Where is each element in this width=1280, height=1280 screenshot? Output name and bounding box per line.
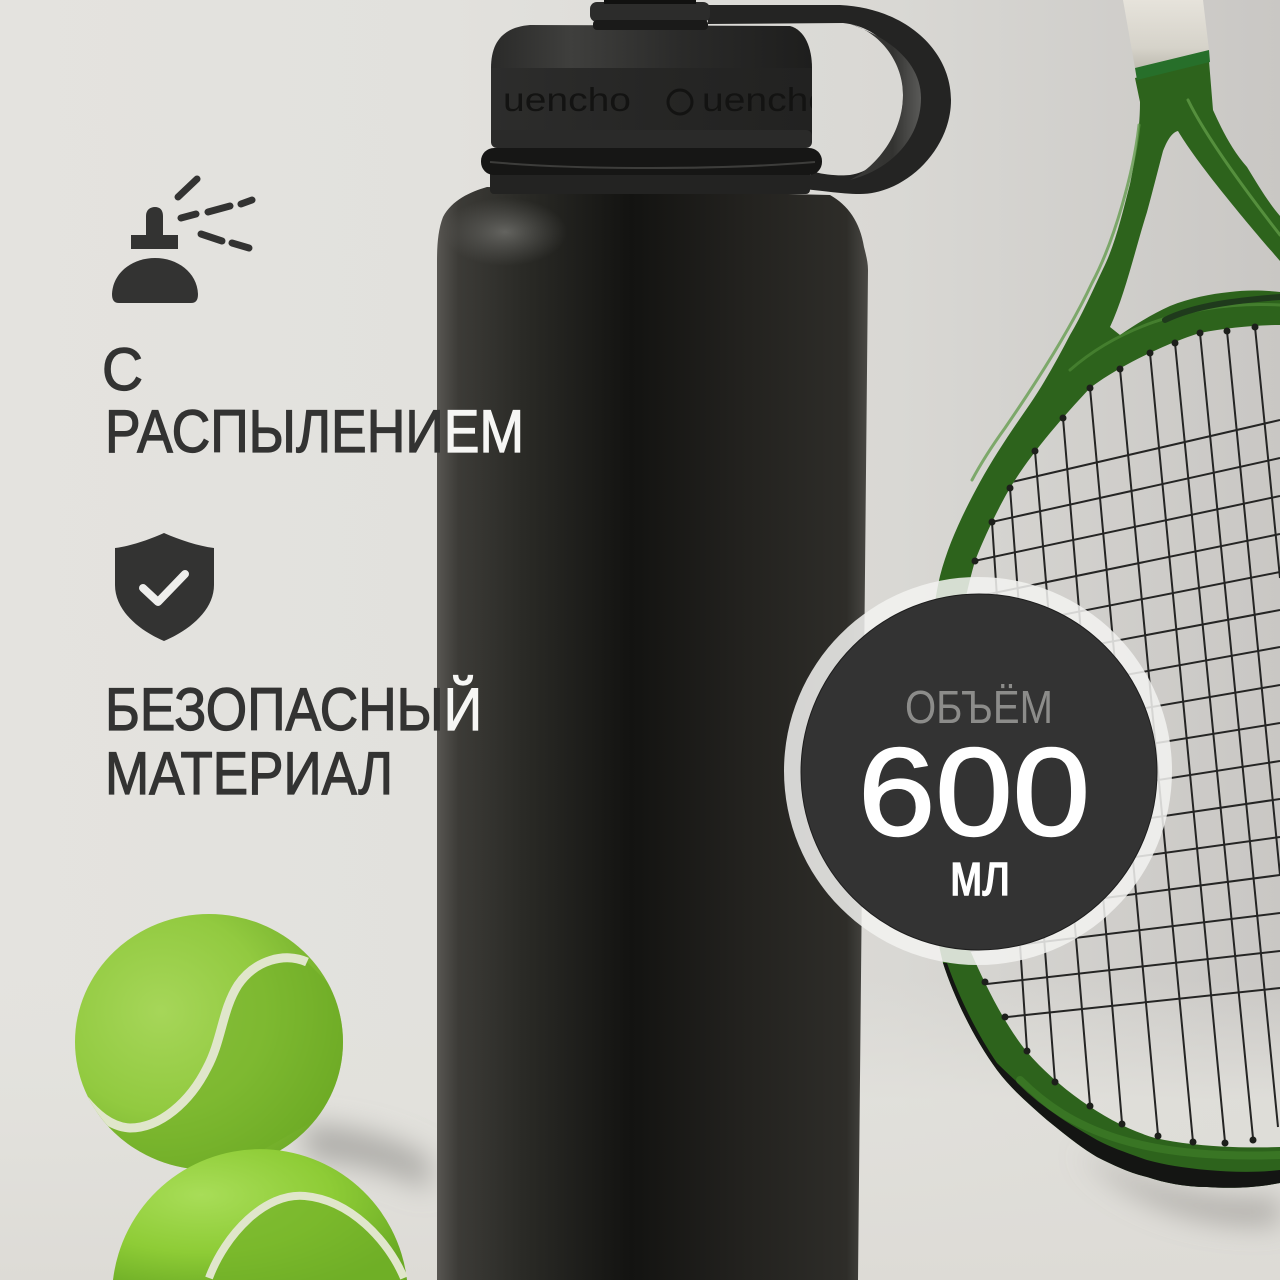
bottle cap [491,25,830,148]
cap brand [506,87,812,116]
bottle neck [490,170,810,194]
volume badge [784,577,1172,965]
bottle neck ring [481,148,822,175]
tennis ball 1 [75,914,350,1180]
shadows on floor [300,1125,1280,1223]
icon: spray [112,179,252,303]
bottle shoulder highlight [443,198,567,266]
text: безопасный материал: МАТЕРИАЛ [105,740,393,807]
cap brand: uencho [702,81,830,118]
text: с распылением: РАСПЫЛЕНИЕМ [105,398,524,465]
badge label: ОБЪЁМ [905,681,1053,733]
cap brand: uencho [503,81,631,118]
text: безопасный материал: БЕЗОПАСНЫЙ [105,676,482,743]
bottle body [437,187,868,1280]
tennis racket [923,0,1280,1188]
racket grip [1123,0,1209,68]
text: безопасный материал: БЕЗОПАСНЫЙ [105,676,482,743]
icon: shield [115,533,214,641]
text: с распылением [104,347,520,454]
text: безопасный материал [105,676,482,807]
text: с распылением: РАСПЫЛЕНИЕМ [105,398,524,465]
text: с распылением: С [102,336,143,403]
racket frame and throat [923,61,1280,1188]
racket underside dark band [943,963,1280,1188]
racket strings [960,327,1280,1142]
string grommets [972,324,1258,1146]
badge number: 600 [858,723,1090,862]
racket collar [1135,50,1210,80]
cap top tab [590,0,710,30]
bottle carry strap [708,5,951,194]
tennis ball 2 [113,1149,407,1280]
badge unit: мл [950,841,1010,908]
racket highlights [972,100,1280,1156]
bottle [437,0,951,1280]
cap band [491,68,812,130]
